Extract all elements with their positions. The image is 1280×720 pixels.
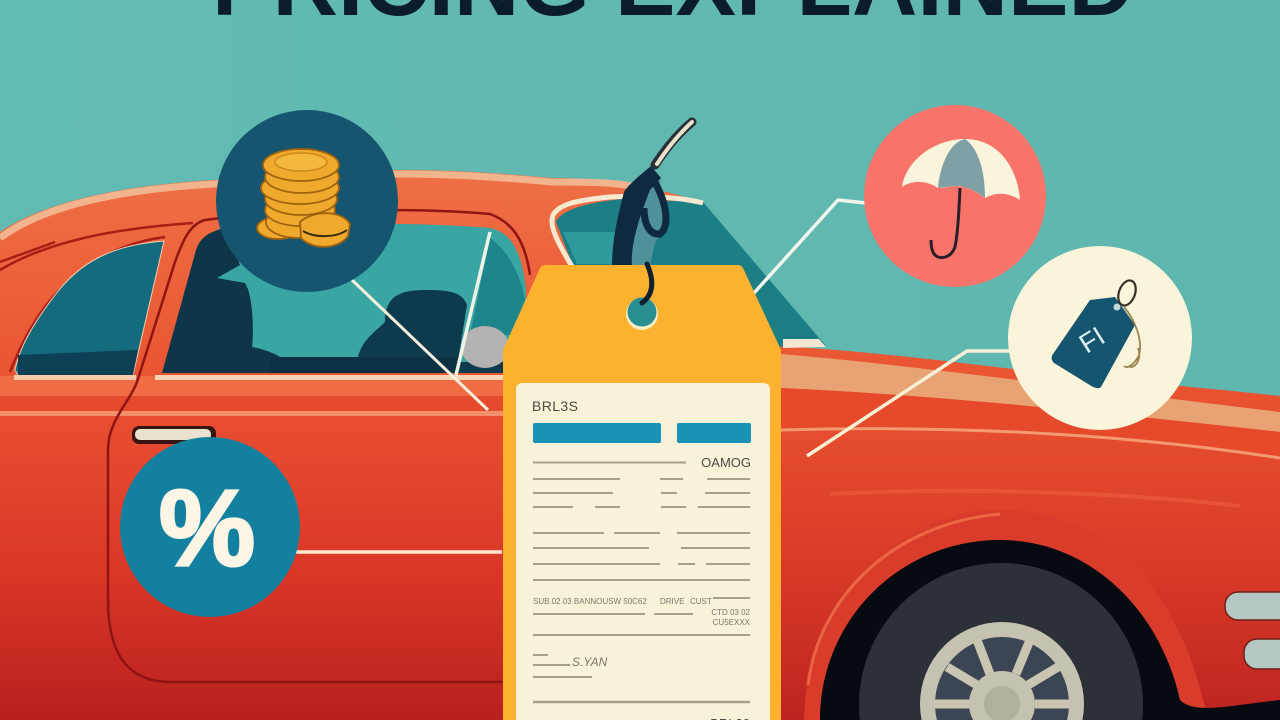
belt line bands [0, 375, 510, 720]
far glass [470, 238, 525, 335]
receipt fine print: DRIVE [660, 597, 684, 606]
windshield [552, 196, 826, 350]
coins connector [352, 280, 488, 410]
amount label: OAMOG [701, 455, 751, 470]
rear seat [272, 290, 467, 373]
side mirror shape [461, 326, 509, 368]
roof highlight [0, 174, 632, 238]
door handle [132, 426, 216, 444]
icon: price tag [1008, 246, 1192, 430]
percent connector [296, 550, 502, 554]
receipt fine print: CU5EXXX [713, 618, 751, 627]
receipt fine print: CUST [690, 597, 712, 606]
wheel [820, 540, 1280, 720]
icon: price tag: FI [1074, 321, 1110, 359]
blue bars [533, 423, 751, 443]
fuel nozzle [612, 122, 692, 266]
receipt fine print: S.YAN [572, 655, 608, 669]
window pillar line [456, 232, 490, 375]
icon: umbrella [864, 105, 1046, 287]
receipt panel [516, 383, 770, 720]
main side window [162, 224, 526, 373]
receipt fine print [533, 597, 751, 720]
receipt fine print: SUB.02 03 BANNOUSW 50C62 [533, 597, 647, 606]
tag connector [807, 351, 1012, 456]
car illustration [0, 170, 1280, 720]
fender arch [804, 510, 1208, 720]
door outline [108, 210, 530, 682]
front seat [162, 228, 280, 373]
receipt heading: BRL3S [532, 398, 578, 414]
receipt lines [533, 462, 750, 702]
connector lines [296, 200, 1012, 552]
icon: percent [120, 437, 300, 617]
car body [0, 170, 1280, 720]
price tag [503, 264, 781, 720]
tag body [503, 265, 781, 720]
hood stripes [780, 354, 1280, 506]
icon: percent: % [159, 467, 255, 588]
rear side window [15, 241, 164, 375]
umbrella connector [754, 200, 866, 293]
bumpers [1225, 592, 1280, 669]
rear door seam [0, 223, 193, 372]
icon: coins [216, 110, 398, 292]
tag hole [626, 298, 658, 330]
receipt fine print: CTD 03 02 [711, 608, 751, 617]
tag string [642, 264, 652, 303]
